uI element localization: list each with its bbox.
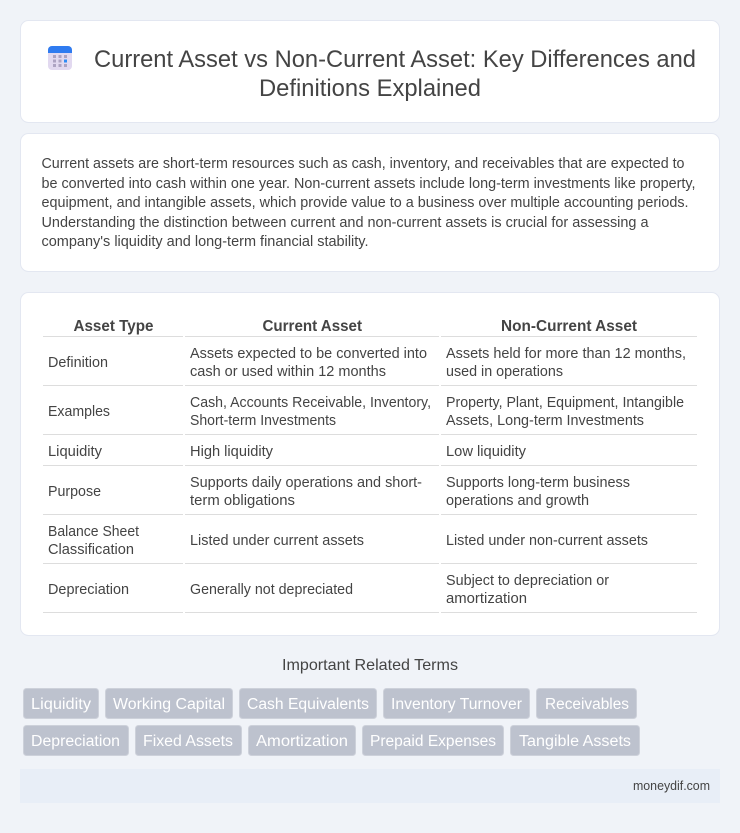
related term chips: Receivables — [545, 696, 629, 713]
intro paragraph: company's liquidity and long-term financial stability. — [42, 234, 368, 250]
header panel — [20, 20, 720, 122]
row: definition: Assets expected to be converted into — [190, 346, 427, 362]
row: examples — [48, 395, 684, 429]
row: definition: used in operations — [446, 364, 563, 380]
row: examples: Cash, Accounts Receivable, Inventory, — [190, 395, 431, 411]
table header row: Non-Current Asset — [501, 318, 637, 335]
row: purpose — [48, 475, 630, 509]
intro paragraph: equipment, and intangible assets, which provide value to a business over multiple accounting periods. — [42, 195, 688, 211]
row: definition: cash or used within 12 months — [190, 364, 386, 380]
related term chips: Liquidity — [31, 696, 91, 713]
related term chips: Cash Equivalents — [247, 696, 369, 713]
row: purpose: operations and growth — [446, 493, 589, 509]
related term chips: Tangible Assets — [519, 733, 631, 750]
title: Definitions Explained — [259, 75, 481, 102]
row: depreciation — [48, 573, 609, 607]
row: purpose: Supports daily operations and short- — [190, 475, 422, 491]
related term chips: Amortization — [256, 733, 348, 750]
related term chips: Depreciation — [31, 733, 120, 750]
row: liquidity: High liquidity — [190, 444, 274, 460]
title — [94, 46, 696, 102]
row: examples: Examples — [48, 404, 110, 420]
intro paragraph: Understanding the distinction between current and non-current assets is crucial for assessing a — [42, 215, 649, 231]
row: liquidity: Low liquidity — [446, 444, 527, 460]
row: examples: Assets, Long-term Investments — [446, 413, 644, 429]
row: examples: Property, Plant, Equipment, Intangible — [446, 395, 684, 411]
footer bar — [20, 769, 720, 803]
row: balance sheet classification: Classification — [48, 542, 134, 558]
row: purpose: Supports long-term business — [446, 475, 630, 491]
intro paragraph — [42, 156, 696, 250]
intro paragraph: Current assets are short-term resources such as cash, inventory, and receivables that are expected to — [42, 156, 685, 172]
title: Current Asset vs Non-Current Asset: Key Differences and — [94, 46, 696, 73]
related term chips: Fixed Assets — [143, 733, 233, 750]
row: balance sheet classification — [48, 524, 648, 558]
row: depreciation: amortization — [446, 591, 527, 607]
table header row — [74, 318, 637, 335]
related term chips: Working Capital — [113, 696, 225, 713]
row: balance sheet classification: Balance Sheet — [48, 524, 139, 540]
row: purpose: term obligations — [190, 493, 295, 509]
row: depreciation: Depreciation — [48, 582, 129, 598]
related term chips — [24, 688, 640, 756]
row: balance sheet classification: Listed under non-current assets — [446, 533, 648, 549]
intro paragraph: be converted into cash within one year. Non-current assets include long-term investments like property, — [42, 176, 696, 192]
row: liquidity: Liquidity — [48, 444, 103, 460]
panel: introduction — [20, 134, 720, 272]
row: examples: Short-term Investments — [190, 413, 336, 429]
row: definition: Assets held for more than 12 months, — [446, 346, 686, 362]
related term chips: Prepaid Expenses — [370, 733, 496, 750]
row: depreciation: Generally not depreciated — [190, 582, 353, 598]
footer source: moneydif.com — [633, 779, 710, 793]
table header row: Current Asset — [262, 318, 362, 335]
row: definition: Definition — [48, 355, 108, 371]
row: balance sheet classification: Listed under current assets — [190, 533, 364, 549]
row: liquidity — [48, 444, 527, 460]
row: depreciation: Subject to depreciation or — [446, 573, 609, 589]
table header row: Asset Type — [74, 318, 154, 335]
row: definition — [48, 346, 686, 380]
row: purpose: Purpose — [48, 484, 101, 500]
heading: important related terms: Important Related Terms — [282, 657, 458, 674]
related term chips: Inventory Turnover — [391, 696, 522, 713]
panel: comparison table — [20, 292, 720, 636]
icon: calendar — [48, 46, 72, 70]
